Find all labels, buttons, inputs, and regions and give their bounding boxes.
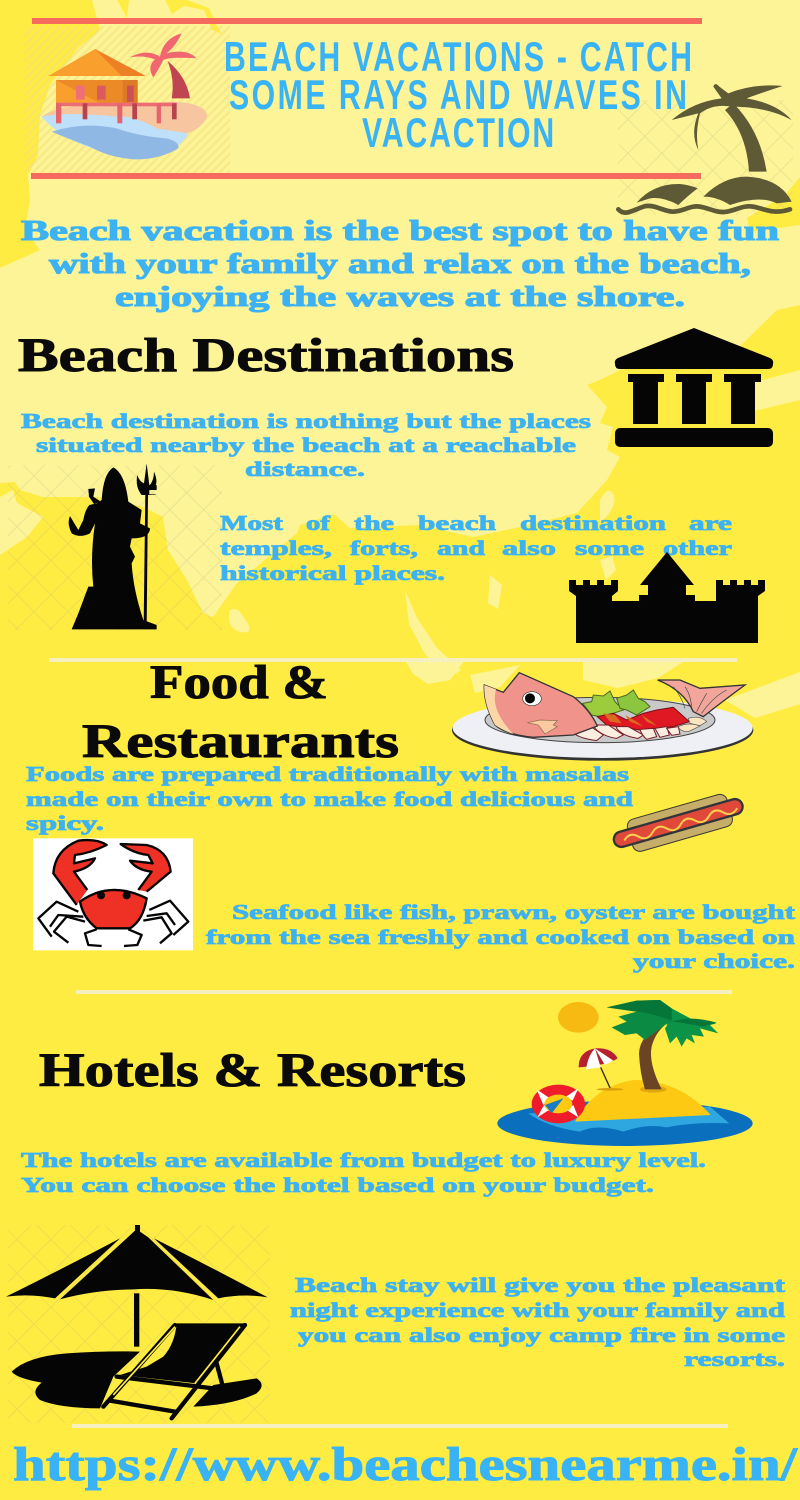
destinations text two: temples, [220,536,332,560]
destinations text two: forts, [350,536,418,560]
header top rule [32,18,702,24]
destinations text one [21,409,591,481]
icon: palm island silhouette [618,84,792,213]
section rule two [76,990,732,994]
destinations text two: other [663,536,732,560]
website url: https://www.beachesnearme.in/ [13,1438,798,1491]
destinations text one: situated nearby the beach at a reachable [36,433,576,457]
food text one [26,762,633,835]
header bottom rule [31,173,701,179]
heading: hotels and resorts: Hotels & Resorts [39,1044,466,1097]
destinations text two [220,511,732,585]
heading: food and restaurants [82,656,399,768]
icon: statue with trident [69,463,157,629]
intro text [21,216,780,313]
title [224,33,692,156]
destinations text two: also [502,536,556,560]
destinations text two: historical places. [220,561,445,585]
hotels text two: night experience with your family and [290,1298,785,1322]
hotels text one: The hotels are available from budget to luxury level. [21,1148,706,1172]
heading: food and restaurants: Restaurants [82,715,399,768]
hotels text one: You can choose the hotel based on your budget. [21,1173,654,1197]
destinations text one: Beach destination is nothing but the places [21,409,591,433]
icon: tropical island [497,1000,753,1146]
food text two: from the sea freshly and cooked on based on [206,925,795,949]
section rule three [72,1424,728,1428]
destinations text one: distance. [245,457,365,481]
destinations text two: the [354,511,394,535]
hotels text two: resorts. [684,1347,785,1371]
icon: castle silhouette [569,552,765,643]
destinations text two: of [306,511,331,535]
title: BEACH VACATIONS - CATCH [224,33,692,80]
heading: beach destinations: Beach Destinations [18,329,514,382]
hotels text one [21,1148,706,1197]
icon: beach hut with palm [42,33,207,159]
food text one: Foods are prepared traditionally with masalas [26,762,629,786]
heading: food and restaurants: Food & [150,656,328,709]
food text one: made on their own to make food delicious and [26,787,633,811]
intro text: enjoying the waves at the shore. [115,282,685,313]
background yellow islands [117,0,222,34]
destinations text two: are [689,511,732,535]
icon: hot dog [610,789,747,858]
icon: fish platter [452,673,753,761]
icon: crab [33,838,193,950]
intro text: with your family and relax on the beach, [49,249,751,280]
food text two [206,900,795,973]
hotels text two [290,1273,785,1371]
section rule one [49,658,737,662]
intro text: Beach vacation is the best spot to have fun [21,216,780,247]
icon: temple [615,328,773,447]
background map [0,0,800,718]
title: VACACTION [362,109,554,156]
destinations text two: Most [220,511,283,535]
destinations text two: beach [418,511,496,535]
destinations text two: and [437,536,485,560]
food text two: your choice. [633,949,795,973]
food text two: Seafood like fish, prawn, oyster are bought [232,900,795,924]
title: SOME RAYS AND WAVES IN [229,71,687,118]
food text one: spicy. [26,811,104,835]
destinations text two: some [575,536,644,560]
destinations text two: destination [520,511,666,535]
hotels text two: Beach stay will give you the pleasant [295,1273,785,1297]
icon: umbrella and deck chair [6,1225,268,1418]
hotels text two: you can also enjoy camp fire in some [298,1323,785,1347]
